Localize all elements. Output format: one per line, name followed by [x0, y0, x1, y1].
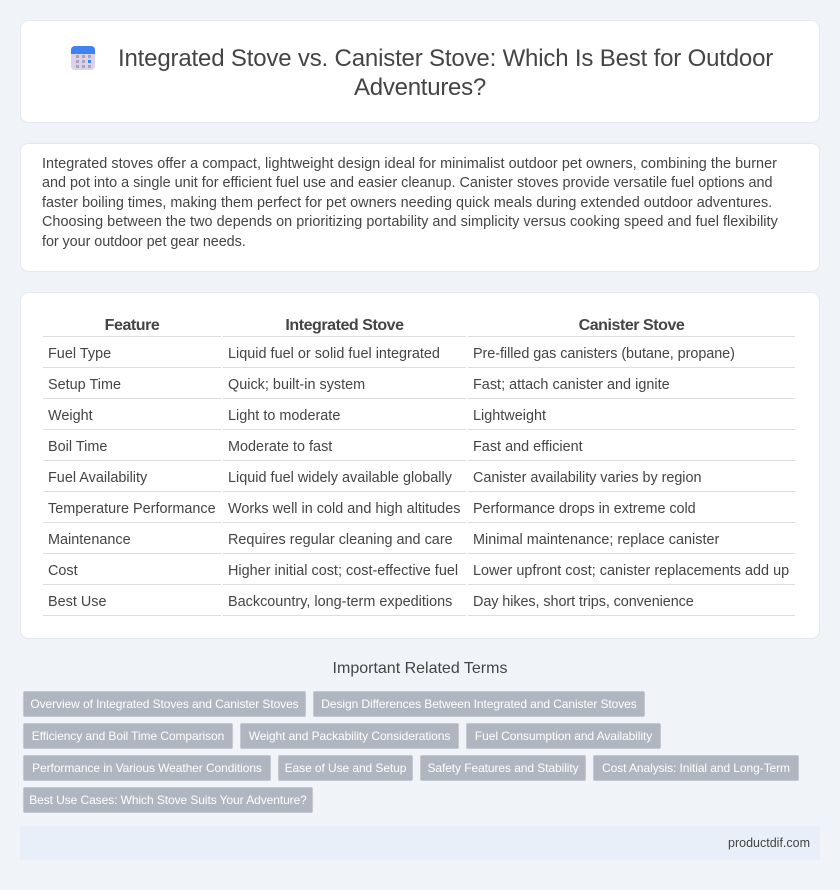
- comparison table: Minimal maintenance; replace canister: [473, 532, 719, 548]
- comparison table: Pre-filled gas canisters (butane, propane): [473, 346, 735, 362]
- text block: introduction: faster boiling times, making them perfect for pet owners needing quick meals during extended outdoor adventures.: [42, 195, 772, 211]
- related terms tags: Overview of Integrated Stoves and Canister Stoves: [30, 697, 299, 711]
- comparison table: Fuel Type: [48, 346, 111, 362]
- comparison table: Lower upfront cost; canister replacements add up: [473, 563, 789, 579]
- comparison table: Temperature Performance: [48, 501, 216, 517]
- panel: header: [20, 20, 820, 123]
- comparison table: Lightweight: [473, 408, 546, 424]
- related terms tags: Fuel Consumption and Availability: [475, 729, 652, 743]
- comparison table: Maintenance: [48, 532, 131, 548]
- text block: introduction: [42, 156, 778, 250]
- heading: related terms: Important Related Terms: [333, 660, 507, 677]
- related terms tags: Design Differences Between Integrated and Canister Stoves: [321, 697, 637, 711]
- text block: introduction: Integrated stoves offer a compact, lightweight design ideal for minimalist outdoor pet owners, combining the burner: [42, 156, 777, 172]
- comparison table: Quick; built-in system: [228, 377, 365, 393]
- title: [118, 45, 773, 101]
- related terms tags: Efficiency and Boil Time Comparison: [32, 729, 224, 743]
- comparison table: Requires regular cleaning and care: [228, 532, 453, 548]
- comparison table: Weight: [48, 408, 93, 424]
- comparison table: Moderate to fast: [228, 439, 332, 455]
- comparison table: Fast; attach canister and ignite: [473, 377, 670, 393]
- comparison table: Integrated Stove: [285, 317, 404, 334]
- title: Adventures?: [354, 74, 486, 101]
- related terms tags: Ease of Use and Setup: [285, 761, 406, 775]
- comparison table: Performance drops in extreme cold: [473, 501, 696, 517]
- comparison table: Backcountry, long-term expeditions: [228, 594, 452, 610]
- footer bar: [20, 826, 820, 860]
- comparison table: Fast and efficient: [473, 439, 583, 455]
- related terms tags: [23, 691, 799, 813]
- comparison table: Works well in cold and high altitudes: [228, 501, 460, 517]
- icon: calendar: [71, 46, 95, 70]
- comparison table: Best Use: [48, 594, 107, 610]
- panel: comparison table: [20, 292, 820, 639]
- text block: introduction: Choosing between the two depends on prioritizing portability and simplicity versus cooking speed and fuel flexibility: [42, 214, 778, 230]
- related terms tags: Performance in Various Weather Conditions: [32, 761, 262, 775]
- comparison table: Light to moderate: [228, 408, 340, 424]
- related terms tags: Best Use Cases: Which Stove Suits Your Adventure?: [29, 793, 307, 807]
- footer source: productdif.com: [728, 836, 810, 850]
- comparison table: Higher initial cost; cost-effective fuel: [228, 563, 458, 579]
- comparison table: Setup Time: [48, 377, 121, 393]
- comparison table: Cost: [48, 563, 78, 579]
- title: Integrated Stove vs. Canister Stove: Which Is Best for Outdoor: [118, 45, 773, 72]
- comparison table: Boil Time: [48, 439, 107, 455]
- text block: introduction: and pot into a single unit for efficient fuel use and easier cleanup. Canister stoves provide versatile fuel options and: [42, 175, 773, 191]
- comparison table: [43, 317, 795, 616]
- comparison table: Canister Stove: [579, 317, 684, 334]
- text block: introduction: for your outdoor pet gear needs.: [42, 234, 246, 250]
- comparison table: Feature: [105, 317, 159, 334]
- comparison table: Liquid fuel or solid fuel integrated: [228, 346, 440, 362]
- comparison table: Fuel Availability: [48, 470, 147, 486]
- comparison table: Liquid fuel widely available globally: [228, 470, 452, 486]
- comparison table: Day hikes, short trips, convenience: [473, 594, 694, 610]
- related terms tags: Weight and Packability Considerations: [249, 729, 450, 743]
- related terms tags: Cost Analysis: Initial and Long-Term: [602, 761, 790, 775]
- related terms tags: Safety Features and Stability: [427, 761, 579, 775]
- comparison table: Canister availability varies by region: [473, 470, 701, 486]
- panel: introduction: [20, 143, 820, 272]
